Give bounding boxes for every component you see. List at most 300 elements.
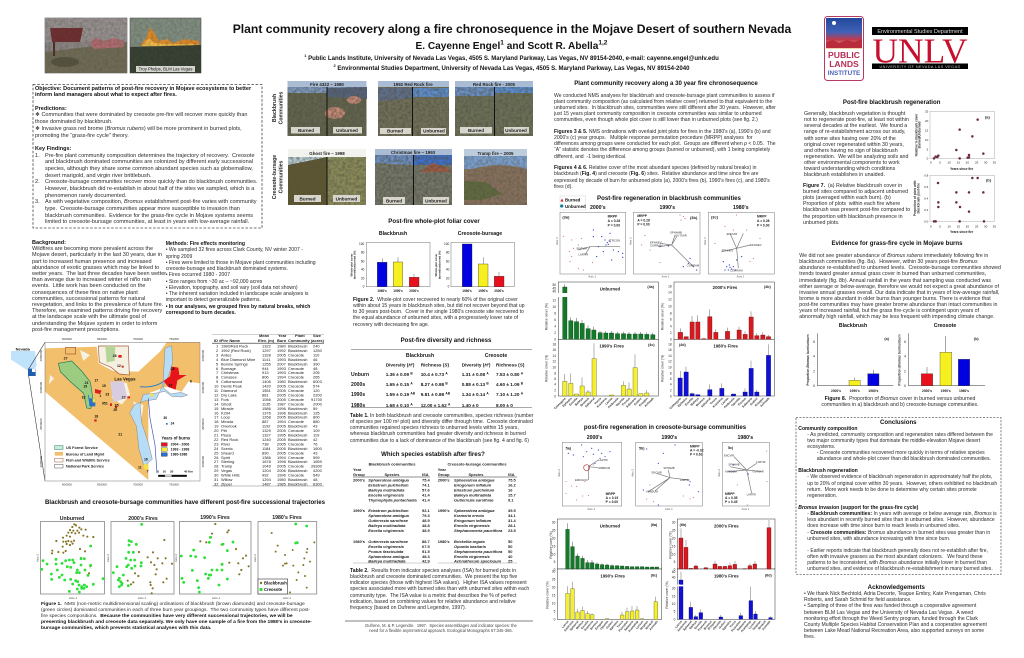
figure 3: blackbrush ordinations: A = 0.28 [757, 219, 770, 223]
table: fire list: Fire Name [221, 338, 241, 343]
figure 7: blackbrush regeneration scatter plots: 20 [925, 119, 929, 123]
figure 6: creosote relative cover bars: 0 [674, 617, 676, 621]
bars: blue 1980s [679, 580, 772, 619]
objective, predictions and key findings: Key Findings: [35, 146, 71, 152]
figure 1 axis labels: Axis 1 [138, 596, 146, 600]
figure 5: creosote ordinations: Axis 1 [665, 507, 673, 511]
figure 1: NMS ordination panels: Unburned [60, 516, 84, 522]
table 2: indicator species: Eriastrum pulchellum [454, 487, 495, 492]
figures 3 and 5 explanation: Figures 3 & 5. NMS ordinations with overlaid joint plots for fires in the 1980's (a), 1990's (b) and [554, 129, 771, 135]
table 1: diversity and richness: B [410, 372, 413, 376]
objective, predictions and key findings: and blackbrush dominated communities are colonized by different early successional [45, 159, 253, 165]
side labels for photo rows: Creosote-bursage [272, 155, 278, 199]
figure 5: creosote ordinations: MRPP [606, 492, 616, 496]
table: fire list: Elev. (m) [258, 338, 275, 343]
figure 6: creosote relative cover bars: Relative cover (%) [546, 581, 550, 609]
bromus invasion conclusion: unburned sites, with abundance increasing with time since burn. [807, 536, 950, 542]
table 1: diversity and richness: Richness (S) [421, 362, 450, 367]
table: fire list: 119 [313, 432, 319, 438]
table 2: indicator species: 50 [508, 539, 513, 544]
figure 6: creosote relative cover bars: 1990's Fires [600, 574, 626, 579]
grass-fire text: invasive annual grasses overall. Our data indicate that in years of low-average rainfall, [799, 290, 1000, 296]
table: fire list: 2005 [277, 428, 287, 433]
figure 6: creosote relative cover bars: Ambrosia [676, 619, 688, 632]
figure 3: blackbrush ordinations: (3b) [690, 215, 698, 220]
table 2: indicator species: Achnatherum speciosum [453, 558, 502, 563]
table: fire list: Creosote [288, 366, 305, 371]
figure 6: creosote relative cover bars: Acamptop [627, 620, 639, 633]
figures 4 and 6 explanation: fires (d). [554, 184, 573, 190]
figure 4: blackbrush relative cover bars: 16 [668, 348, 672, 352]
map of fires in southern Nevada: 650000 [97, 483, 107, 487]
table 1: diversity and richness: Unburn [351, 372, 369, 378]
table: fire list: 1420 [262, 384, 272, 389]
table: fire list: 19 [214, 424, 218, 429]
figure 6: creosote relative cover bars: Opuntia [712, 619, 722, 631]
methods text: creosote-bursage and blackbrush dominated systems. [166, 266, 288, 272]
table 2: indicator species: 42.9 [422, 558, 430, 563]
table 1 caption: communities regained species richness to unburned levels within 15 years, [350, 425, 519, 431]
table: fire list: Blackbrush [288, 482, 307, 486]
methods text: Methods: Fire effects monitoring [166, 241, 245, 247]
table 1: diversity and richness: A [486, 392, 489, 396]
table 2: indicator species: 57.6 [422, 487, 430, 492]
figure 4: blackbrush relative cover bars: Relative cover (%) [544, 303, 548, 330]
table 2 caption: indication, based on combining values for relative abundance and relative [350, 599, 516, 605]
chronosequence intro: We conducted NMS analyses for blackbrush and creosote-bursage plant communities to assess if [554, 93, 774, 99]
photo row: blackbrush communities: Burned [387, 129, 403, 134]
table 1 caption: communities due to a lack of dominance of the blackbrush (see fig. 4 and fig. 6) [350, 438, 529, 444]
table 1: diversity and richness: 1.36 ± 0.09 [386, 372, 409, 377]
photo row: blackbrush communities [288, 81, 533, 136]
table: fire list: 4 [216, 357, 219, 362]
affiliations [304, 53, 719, 72]
figure 2: foliar cover bar charts: 40 [446, 268, 450, 272]
figure 6: creosote relative cover bars: Stephan [751, 620, 762, 631]
table: fire list: 944 [262, 366, 269, 371]
blackbrush regeneration text: not to regenerate post-fire, at least not within [804, 117, 909, 123]
table: fire list: 2005 [277, 415, 287, 420]
figure 6: creosote relative cover bars: 20 [552, 585, 556, 589]
figure 3: blackbrush ordinations: Axis 1 [662, 274, 670, 278]
figure 4: blackbrush relative cover bars: Coleogyne [668, 396, 682, 410]
figure 8: Bromus proportion bar charts: Proportion Bromus burn/unburn [898, 334, 902, 386]
figure 6: creosote relative cover bars: Brickell [644, 620, 654, 630]
figure 3: blackbrush ordinations: CORRAM [687, 264, 700, 268]
figure 2: foliar cover bar charts: 40 [361, 268, 365, 272]
figure 7 caption: unburned plots. [803, 220, 840, 226]
authors: E. Cayenne Engel1 and Scott R. Abella1,2 [416, 40, 607, 52]
logo: Public Lands Institute: INSTITUTE [828, 70, 860, 77]
table: fire list: Blackbrush [288, 357, 307, 362]
figure 4: blackbrush relative cover bars: 10 [552, 305, 556, 309]
table: fire list: 1328 [262, 352, 272, 357]
figure 4: blackbrush relative cover bars: Gutierr [749, 396, 759, 406]
creosote decade labels: 1990's [662, 435, 677, 441]
table: fire list: Creosote [288, 441, 305, 446]
background text: Therefore, we examined patterns driving fire recovery [32, 308, 162, 314]
community composition conclusion: abundance and whole-plot cover than did blackbrush dominated communities. [817, 456, 991, 462]
figure 2: foliar cover bar charts: burned/unburned (%) [353, 251, 357, 279]
figure 3: blackbrush ordinations: (3a) [562, 214, 570, 219]
figure 5: creosote ordinations: A = 0.05 [725, 496, 738, 500]
table 1: diversity and richness: 1980s [351, 403, 365, 409]
table 1: diversity and richness: 1.34 ± 0.14 [462, 392, 485, 397]
background text: than average due to increased winter el niño rain [32, 277, 151, 283]
table 2: indicator species: Encelia virginensis [454, 523, 490, 528]
figure 4: blackbrush relative cover bars: 14 [552, 354, 556, 358]
figure 6: creosote relative cover bars: Acamptop [740, 620, 752, 633]
figure 4: blackbrush relative cover bars: Bromus [579, 396, 590, 407]
objective, predictions and key findings: desert marigold, and virgin river brittlebush. [45, 173, 151, 179]
background text: revegetation, and links to the prevalence of future fire. [32, 302, 163, 308]
logo: Public Lands Institute: PUBLIC [828, 50, 860, 60]
figure 4: blackbrush relative cover bars: 1980's Fires [713, 344, 739, 349]
figure 4: blackbrush relative cover bars: 40 [552, 290, 556, 294]
figure 6: creosote relative cover bars: (6c) [651, 574, 658, 578]
bars: yellow 1990s [563, 359, 649, 396]
table: fire list: 1204 [262, 468, 272, 473]
table: fire list: Mean [259, 333, 270, 338]
figure 6: creosote relative cover bars: Sphaeral [569, 620, 580, 632]
objective box outline [33, 84, 262, 228]
methods text: • In our analyses, we grouped fires by natural breaks, which [166, 304, 310, 310]
figure 7: blackbrush regeneration scatter plots: Years since fire [950, 167, 973, 171]
figure 4: blackbrush relative cover bars: Salazaria [741, 396, 753, 409]
figure 4: blackbrush relative cover bars: Krameria [712, 396, 724, 409]
citation: need for a flexible asymmetrical approach. Ecological Monographs 67:345-366. [369, 628, 513, 633]
blackbrush regeneration conclusion: up to 20% of original cover within 30 years. However, others exhibited no blackbrush [807, 481, 997, 487]
table 2: indicator species: Baileya multiradiata [368, 523, 406, 528]
table: fire list: Christmas [221, 370, 239, 375]
figure 5: creosote ordinations: P = 0.00 [606, 500, 618, 504]
figure 6: creosote relative cover bars: Psorothm [617, 619, 629, 633]
figure 4: blackbrush relative cover bars: 12 [668, 298, 672, 302]
map of fires in southern Nevada: 25 [115, 404, 119, 408]
figure 4: blackbrush relative cover bars: 50 [552, 283, 556, 287]
blackbrush decade labels: 1980's [733, 205, 749, 211]
table: fire list: 1268 [262, 415, 272, 420]
figure 4: blackbrush relative cover bars: 6 [670, 377, 672, 381]
table: fire list: 549 [313, 473, 320, 478]
photo row: blackbrush communities: 1992 Red Rock fire [393, 82, 433, 87]
figure 6: creosote relative cover bars: Lycium [747, 619, 757, 630]
table 2: indicator species: Baileya multiradiata [368, 558, 406, 563]
table 1: diversity and richness: 2000s [351, 382, 365, 388]
table: fire list: 738 [262, 441, 269, 446]
figures 4 and 6 explanation: blackbrush (Fig. 4) and creosote (Fig. 6) sites. Relative abundance and time since fire are [554, 171, 758, 177]
foliar cover subheadings [379, 230, 502, 236]
bars: red 2000s [679, 528, 771, 569]
table 2: indicator species: 40 [508, 554, 513, 559]
table: fire list: 240 [313, 344, 320, 348]
table: fire list: Tramp [221, 464, 233, 469]
grass-fire text: brome is more abundant in older burns than younger burns. There is evidence that [799, 296, 991, 302]
map of fires in southern Nevada: 4050000 [201, 350, 205, 361]
table: fire list: 913 [262, 370, 269, 375]
table 2: indicator species: Sphaeralcea ambigua [454, 508, 495, 513]
figure 3: blackbrush ordinations: MRPP [757, 215, 767, 219]
table 2: indicator species: 34.1 [508, 513, 516, 518]
table 2 caption: frequency (based on Dufrene and Legendre, 1997). [350, 605, 466, 611]
table: fire list: Blackbrush [288, 446, 307, 451]
figure 6: creosote relative cover bars: Opuntia [599, 619, 609, 631]
table 2: indicator species: Opuntia basilaris [454, 544, 487, 549]
methods text: important to detect generalizable patterns. [166, 297, 261, 303]
grass-fire text: We did not see greater abundance of Bromus rubens immediately following fire in [799, 253, 988, 259]
figure 2 caption: within about 15 years in blackbrush sites, but did not recover beyond that up [353, 303, 525, 309]
objective, predictions and key findings: Creosote-bursage communities recover more quickly than do blackbrush communities. [45, 179, 257, 185]
figure 3: blackbrush ordinations: MRPP [637, 214, 648, 218]
table 1: diversity and richness: A [445, 372, 448, 376]
table: fire list: 800 [313, 415, 320, 420]
figure 6: creosote relative cover bars: Gutierr [718, 619, 727, 630]
table 1: diversity and richness: 8.27 ± 0.98 [421, 382, 444, 387]
figure 6: creosote relative cover bars: Relative cover (%) [549, 531, 553, 559]
table: fire list: Creosote [288, 428, 305, 433]
table: fire list: Creosote [288, 455, 305, 460]
figure 6: creosote relative cover bars: 10 [672, 602, 676, 606]
figure 7 caption: blackbrush was present post-fire compared to [803, 207, 910, 213]
map of fires in southern Nevada: 750000 [169, 337, 179, 341]
figure 8 caption [821, 396, 979, 408]
table 2: indicator species: 79.3 [422, 513, 430, 518]
community composition conclusion [798, 426, 993, 462]
table: fire list: 1980 [277, 477, 287, 482]
figure 6: creosote relative cover bars: Ephedra [609, 619, 619, 631]
background text: communities, successional patterns for natural [32, 296, 145, 302]
figure 4: blackbrush relative cover bars: 4 [670, 383, 672, 387]
table: fire list: 20 [214, 428, 219, 433]
figure 3: blackbrush ordinations: ENCVIR [727, 232, 737, 236]
figure 6: creosote relative cover bars: Eriogon [594, 620, 604, 631]
figure 6: creosote relative cover bars: Krameria [583, 619, 594, 632]
table 2: indicator species: ISA [508, 472, 515, 477]
table 2: indicator species: 74.1 [422, 482, 430, 487]
blackbrush regeneration heading right: Post-fire blackbrush regeneration [843, 98, 940, 106]
photo row: creosote-bursage communities: Tramp fire – 2005 [478, 151, 514, 156]
table 2: indicator species: 51.5 [422, 549, 430, 554]
map of fires in southern Nevada: Las Vegas [114, 376, 136, 381]
table: fire list: Creosote [288, 473, 305, 478]
table 2: indicator species: Stephanomeria pauciflora [454, 528, 503, 533]
figure 1 caption: bursage communities, which prevents statistical analyses with this data. [41, 626, 211, 631]
side labels for photo rows [272, 91, 284, 199]
figure 6: creosote relative cover bars: Larrea [674, 619, 683, 629]
table: fire list: 9 [216, 379, 218, 384]
figure 6: creosote relative cover bars: 60 [672, 570, 676, 574]
photo row: creosote-bursage communities: Burned [386, 198, 402, 204]
figures 3 and 5 explanation: different, and -1 being identical. [554, 154, 626, 160]
table: fire list: 1992 [277, 348, 286, 353]
figure 7: blackbrush regeneration scatter plots: 20 [966, 160, 969, 164]
legend: burned / unburned [560, 196, 586, 210]
figure 1: NMS ordination panels: 1990's Fires [200, 515, 230, 521]
table 2: indicator species: Gutierrezia sarothrae [368, 539, 409, 544]
figure 6: creosote relative cover bars: 15 [672, 594, 676, 598]
figure 6: creosote relative cover bars: Gutierr [605, 619, 615, 630]
table: fire list: 13 [214, 397, 219, 402]
figure 6: creosote relative cover bars: Salazaria [736, 619, 747, 632]
map of fires in southern Nevada: 6 [190, 379, 192, 383]
table: fire list: 1600 [313, 446, 323, 451]
figure 5: creosote ordinations: ENCVIR [724, 454, 734, 458]
figure 5: creosote ordinations: AMBDUM [646, 490, 658, 494]
table: fire list: 1994 [277, 375, 287, 380]
table: fire list: 12 [214, 392, 218, 398]
table 1: diversity and richness: 10.4 ± 0.73 [421, 372, 444, 377]
table: fire list: 8 [216, 375, 219, 380]
figures 4 and 6 explanation: Figures 4 & 6. Relative cover of the most abundant species (defined by natural breaks) in [554, 165, 756, 171]
map of fires in southern Nevada: 19 [83, 385, 87, 389]
table 2: indicator species: Encelia virginensis [454, 554, 490, 559]
table: fire list: Zipper [221, 482, 233, 486]
bromus invasion conclusion: does increase with time since burn to reach levels in unburned sites. [807, 523, 960, 529]
table 1: diversity and richness [351, 349, 532, 409]
figure 8: Bromus proportion bar charts: 2 [813, 369, 815, 373]
figure 5: creosote ordinations: Axis 2 [717, 469, 721, 477]
figure 6: creosote relative cover bars: 25 [552, 577, 556, 581]
blackbrush regeneration text: other environmental components to work [804, 160, 900, 166]
figure 7: blackbrush regeneration scatter plots: 0.4 [924, 197, 929, 201]
figure 4: blackbrush relative cover bars: 16 [668, 284, 672, 288]
map of fires in southern Nevada: 600000 [62, 337, 72, 341]
table: fire list: Loop [221, 415, 231, 420]
figure 5: creosote ordinations: AMBDUM [725, 469, 737, 473]
bromus invasion conclusion: often with invasive grasses as the most abundant colonizers. We found these [807, 554, 983, 560]
table: fire list: Red Rock [221, 437, 238, 442]
figure 4: blackbrush relative cover bars: 2000's Fires [713, 285, 738, 290]
table: fire list: 1192 [262, 424, 270, 429]
figure 8: Bromus proportion bar charts: 0 [904, 384, 906, 388]
figure 1 axis labels: Axis 1 [69, 596, 77, 600]
table 1 caption: whereas blackbrush communities had greater diversity and richness in burned [350, 431, 526, 437]
figure 6: creosote relative cover bars: 5 [554, 560, 556, 564]
figure 8: Bromus proportion bar charts: 1980's [959, 389, 969, 393]
figure 3: blackbrush ordinations: GUTSAR [675, 234, 687, 238]
figure 3: blackbrush ordinations: EPHNEV [750, 243, 762, 247]
figure 4: blackbrush relative cover bars: Prunus [621, 396, 631, 407]
figure 4: blackbrush relative cover bars: 2 [554, 331, 556, 335]
table 2: indicator species: Group [353, 472, 365, 477]
table: fire list: 992 [262, 473, 269, 478]
table 1: diversity and richness: AB [410, 392, 416, 396]
objective, predictions and key findings: species, although they share some common abundant species such as globemallow, [45, 166, 253, 172]
figure 6: creosote relative cover bars: Baileya [575, 619, 585, 630]
table: fire list: 16 [214, 410, 219, 415]
figure 6: creosote relative cover bars: 30 [552, 521, 556, 525]
figure 3: blackbrush ordinations: LARTRI [578, 252, 589, 256]
blackbrush regeneration conclusion [798, 468, 997, 499]
figure 2 caption: Figure 2. Whole-plot cover recovered to nearly 60% of the original cover [353, 297, 518, 303]
figure 2: foliar cover bar charts: burned/unburned (%) [437, 251, 441, 279]
figure 2 caption: to 30 years post-burn. Cover in the single 1980's creosote site recovered to [353, 309, 524, 315]
table: fire list: 14 [214, 401, 219, 406]
table 1: diversity and richness: A [521, 372, 524, 376]
figure 5: creosote ordinations: Axis 2 [557, 469, 561, 477]
map of fires in southern Nevada: 23 [105, 393, 109, 397]
figure 6: creosote relative cover bars: 2000's Fires [714, 524, 739, 529]
photo: flames [130, 18, 201, 73]
map of fires in southern Nevada: 4000000 [39, 382, 43, 393]
table: fire list: Creosote [288, 388, 305, 393]
figure 7: blackbrush regeneration scatter plots: 5 [939, 224, 941, 228]
figure 2: foliar cover bar charts: 80 [361, 251, 365, 255]
table: fire list: 1993 [277, 357, 287, 362]
table: fire list: 59 [313, 406, 317, 411]
figure 1 caption: Figure 1. NMS (non-metric multidimensional scaling) ordinations of blackbrush (brown diamonds) and creosote-bursage [41, 602, 305, 607]
table: fire list: 15 [214, 406, 219, 411]
table: fire list: 1294 [262, 477, 272, 482]
figure 2: foliar cover bar charts: 0 [363, 285, 365, 289]
photo row: creosote-bursage communities: Burned [299, 196, 316, 202]
side labels for photo rows: Communities [278, 160, 284, 193]
figure 4: blackbrush relative cover bars: (4c) [648, 343, 655, 347]
acknowledgements text: monitoring effort through the Weed Sentry program, funded through the Clark [804, 616, 978, 622]
figure 6: creosote relative cover bars: 10 [552, 601, 556, 605]
figure 1 legend: Blackbrush [264, 580, 287, 586]
figure 2: foliar cover bar charts: 0 [448, 285, 450, 289]
table 2 caption: Table 2. Results from indicator species analyses (ISA) for burned plots in [350, 568, 516, 574]
figure 1 axis labels [36, 554, 291, 600]
table: fire list: (acres) [311, 338, 325, 343]
foliar cover subheadings: Blackbrush [379, 230, 407, 236]
table 1: diversity and richness: A [521, 392, 524, 396]
table: fire list: 110 [313, 352, 320, 357]
figure 6: creosote relative cover bars: Achnath [761, 620, 772, 631]
figure 3: blackbrush ordinations: Axis 1 [588, 274, 596, 278]
1980s creosote points [296, 524, 307, 543]
chronosequence intro: unburned sites. In blackbrush sites, communities were still different after 30 years. However, after [554, 105, 776, 111]
table: fire list: Blackbrush [288, 468, 307, 473]
table: fire list: 109 [313, 428, 320, 433]
figure 5: creosote ordinations: LARTRI [598, 458, 608, 462]
figure 7: blackbrush regeneration scatter plots: 15 [957, 160, 960, 164]
figure 8 caption: Figure 8. Proportion of Bromus cover in burned versus unburned [825, 396, 975, 402]
figure 4: blackbrush relative cover bars: Encelia [568, 396, 579, 407]
background text: Background: [32, 240, 66, 246]
figure 6: creosote relative cover bars: 25 [552, 529, 556, 533]
figure 5: creosote ordinations: SPHAMB [728, 463, 740, 467]
figure 7: blackbrush regeneration scatter plots: 0.6 [924, 185, 929, 189]
acknowledgements heading: Acknowledgements [868, 584, 925, 591]
figure 1: NMS ordination panels: 2000's Fires [128, 516, 158, 522]
table: fire list: 205 [313, 370, 320, 375]
figure 4: blackbrush relative cover bars: 0 [670, 394, 672, 398]
methods text: • Size ranges from ~30 ac – ~92,000 acres [166, 278, 262, 284]
figure 4: blackbrush relative cover bars: 0 [554, 394, 556, 398]
table: fire list: 1993 [277, 370, 287, 375]
figure 2: foliar cover bar charts: 1990's [478, 289, 488, 293]
figure 6: creosote relative cover bars: 15 [672, 544, 676, 548]
objective, predictions and key findings: 3. [35, 199, 40, 205]
table 2: indicator species: 9.1 [508, 497, 514, 502]
figure 2: foliar cover bar charts: 2000's [494, 289, 504, 293]
title: Plant community recovery along a fire chronosequence in the Mojave Desert of southern Nevada [233, 22, 791, 36]
table 2: indicator species: 1990's [353, 508, 366, 513]
table: fire list: 1980/Red Rock [221, 344, 248, 348]
table: fire list: Burnage [221, 366, 237, 371]
table: fire list: 5 [216, 361, 219, 366]
table: fire list: 21 [214, 432, 218, 438]
table 2: indicator species: 1980's [438, 539, 450, 544]
table 2: indicator species: Encelia virginensis [368, 544, 405, 549]
table: fire list: 1049 [262, 464, 271, 469]
table 2: indicator species: 23.5 [508, 528, 516, 533]
grass-fire text: abundance re-established to unburned levels. Creosote-bursage communities showed [799, 265, 1001, 271]
blackbrush regeneration heading: Post-fire regeneration in blackbrush communities [597, 195, 741, 202]
table 2: indicator species: 38.9 [422, 528, 430, 533]
